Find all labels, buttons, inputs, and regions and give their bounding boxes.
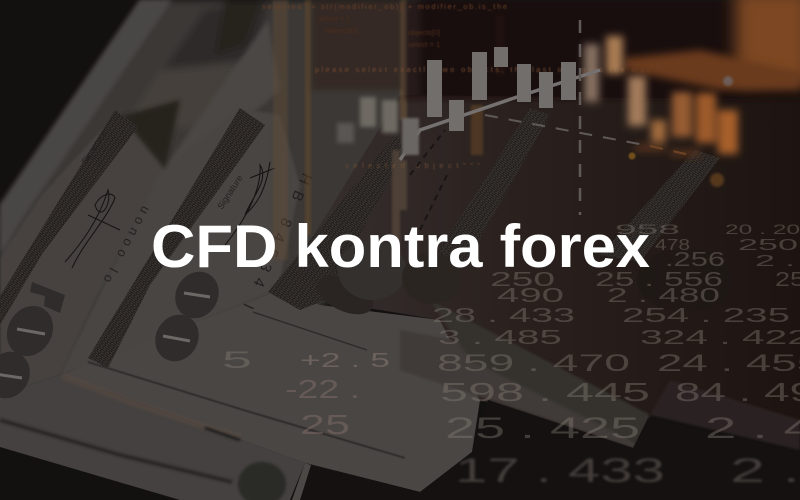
overlay: code text: please select exactly two objects, the last one gets the modifier unless its selected <box>315 65 785 74</box>
bill two: body <box>60 108 300 375</box>
market numbers: 598 . 445 <box>440 377 650 407</box>
bill one: left edge strip <box>0 0 172 258</box>
market numbers: -22 . <box>285 374 360 404</box>
market numbers: 958 <box>615 221 681 237</box>
market numbers: 3 . 485 <box>438 327 562 349</box>
title: CFD kontra forex <box>151 213 650 280</box>
chart: trend line <box>400 70 600 160</box>
overlay: code text: selected" + str(modifier_ob)) + modifier_ob.is_the <box>262 2 507 11</box>
overlay: code text: selected object""" <box>345 161 480 170</box>
signatures <box>65 162 275 268</box>
market numbers: .256 <box>665 249 725 271</box>
overlay: code text: objects[0] <box>325 26 357 35</box>
market numbers: 2 . 4 <box>705 412 800 445</box>
overlay: code text: select = 1 <box>318 14 350 23</box>
market numbers: 84 . 49 <box>675 377 800 407</box>
market numbers: 250 <box>490 269 555 291</box>
blurred upper banknote area <box>0 0 420 420</box>
market numbers: 25 . 556 <box>595 269 723 291</box>
chart: candlesticks <box>402 47 576 155</box>
bill one: body <box>0 112 165 395</box>
thin engraved line <box>88 362 405 458</box>
market numbers: 324 . 422 <box>640 327 800 349</box>
overlay: code text <box>262 2 785 170</box>
chart: dashed guides <box>485 20 690 215</box>
bill three: body <box>62 290 480 492</box>
market numbers: 2 . <box>755 253 795 270</box>
shadow under top bill <box>62 376 240 437</box>
dark strip under lower bill <box>0 420 232 482</box>
market numbers: 490 <box>497 285 564 307</box>
lower bill <box>0 375 305 500</box>
zero ovals <box>0 240 733 406</box>
market numbers: 24 . 455 <box>657 350 800 377</box>
market numbers: 17 . 433 <box>455 452 665 490</box>
market numbers: 20 . 20 <box>725 221 800 237</box>
market numbers: 2 . 480 <box>607 285 720 307</box>
market numbers: 859 . 470 <box>437 350 630 377</box>
market numbers: 254 . 235 <box>622 305 790 327</box>
market numbers: +2 . 5 <box>300 350 390 372</box>
dark wedge between bills <box>122 100 180 168</box>
small engraved letters: Signature <box>215 173 245 211</box>
market numbers: 2 . <box>730 452 800 490</box>
oval bars <box>0 293 210 378</box>
right side banknotes <box>280 95 800 448</box>
small engraved letters: Signature <box>79 128 109 166</box>
overlay: code text: objects[0] <box>408 28 440 37</box>
market numbers: 25 <box>300 409 350 440</box>
overlay: code text: select = 1 <box>408 40 440 49</box>
market numbers <box>222 221 800 490</box>
orange candlestick bokeh <box>584 0 800 187</box>
market numbers: 25 <box>775 269 800 291</box>
dark lower right <box>420 400 800 500</box>
market numbers: 478 <box>655 237 690 254</box>
overlay: code columns <box>273 0 800 260</box>
engraved bands <box>0 108 720 368</box>
serial number: HB 84534 I <box>238 170 315 314</box>
market numbers: 250 <box>738 237 798 254</box>
chart: dark dashed ticks <box>410 130 447 230</box>
small engraved letters: uonoo lo <box>98 204 154 290</box>
market numbers: 28 . 433 <box>432 305 575 327</box>
market numbers: 5 <box>222 347 252 374</box>
market numbers: 25 . 425 <box>445 412 640 445</box>
bill two: left edge strip <box>163 20 280 180</box>
small engraved letters <box>79 128 245 290</box>
